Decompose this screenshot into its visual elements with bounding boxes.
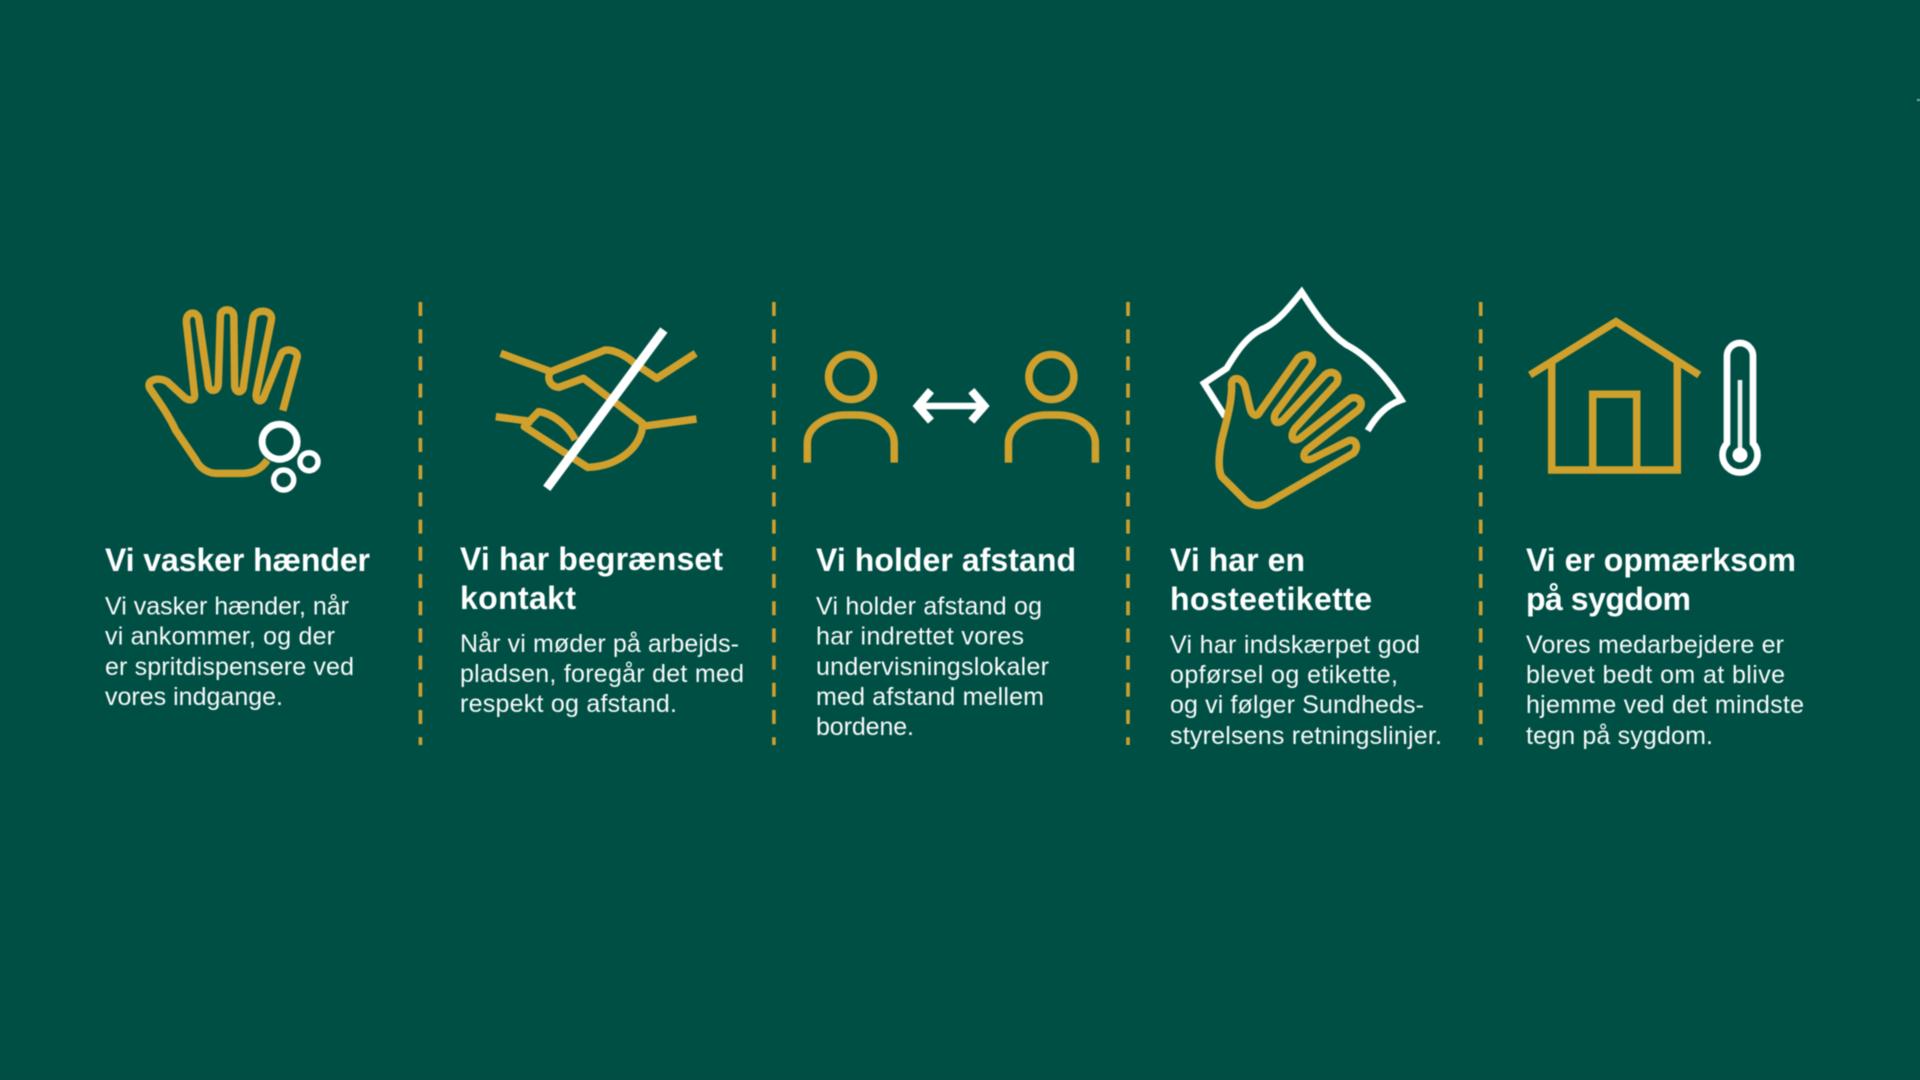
- heading: Vi vasker hænder: [105, 542, 370, 578]
- icon: crossed out handshake: [496, 330, 696, 488]
- heading: [1526, 542, 1796, 617]
- body text: undervisningslokaler: [816, 653, 1049, 681]
- body text: Vi holder afstand og: [816, 592, 1042, 620]
- panel: vi holder afstand: [807, 354, 1095, 741]
- body text: styrelsens retningslinjer.: [1170, 722, 1442, 750]
- body text: opførsel og etikette,: [1170, 661, 1398, 689]
- body text: med afstand mellem: [816, 683, 1044, 711]
- panel: vi vasker hænder: [105, 310, 370, 711]
- heading: hosteetikette: [1170, 581, 1372, 617]
- body text: respekt og afstand.: [460, 690, 677, 718]
- heading: Vi holder afstand: [816, 542, 1076, 578]
- body text: [105, 592, 354, 711]
- panel: vi har en hosteetikette: [1170, 292, 1442, 750]
- body text: hjemme ved det mindste: [1526, 691, 1804, 719]
- heading: [1170, 542, 1372, 617]
- icon: house: [1530, 322, 1699, 470]
- body text: bordene.: [816, 713, 914, 741]
- icon: hand with soap bubbles: [149, 310, 318, 490]
- body text: og vi følger Sundheds-: [1170, 691, 1424, 719]
- body text: tegn på sygdom.: [1526, 722, 1713, 750]
- icon: hand wiping with cloth: [1204, 292, 1401, 505]
- heading: Vi har begrænset: [460, 541, 723, 577]
- body text: [1526, 631, 1804, 750]
- body text: er spritdispensere ved: [105, 653, 354, 681]
- body text: vores indgange.: [105, 683, 283, 711]
- body text: Vi vasker hænder, når: [105, 592, 349, 620]
- body text: blevet bedt om at blive: [1526, 661, 1785, 689]
- heading: kontakt: [460, 580, 576, 616]
- panel: vi har begrænset kontakt: [460, 330, 744, 718]
- body text: vi ankommer, og der: [105, 622, 335, 650]
- heading: på sygdom: [1526, 581, 1691, 617]
- body text: pladsen, foregår det med: [460, 660, 744, 688]
- heading: [460, 541, 723, 616]
- body text: [816, 592, 1049, 741]
- body text: Vi har indskærpet god: [1170, 631, 1420, 659]
- heading: Vi har en: [1170, 542, 1305, 578]
- body text: Vores medarbejdere er: [1526, 631, 1784, 659]
- panel: vi er opmærksom på sygdom: [1526, 322, 1804, 750]
- body text: har indrettet vores: [816, 622, 1024, 650]
- heading: Vi er opmærksom: [1526, 542, 1796, 578]
- body text: [1170, 631, 1442, 750]
- body text: Når vi møder på arbejds-: [460, 630, 739, 658]
- body text: [460, 630, 744, 718]
- icon: thermometer: [1722, 343, 1758, 473]
- icon: two people with arrow between: [807, 354, 1095, 463]
